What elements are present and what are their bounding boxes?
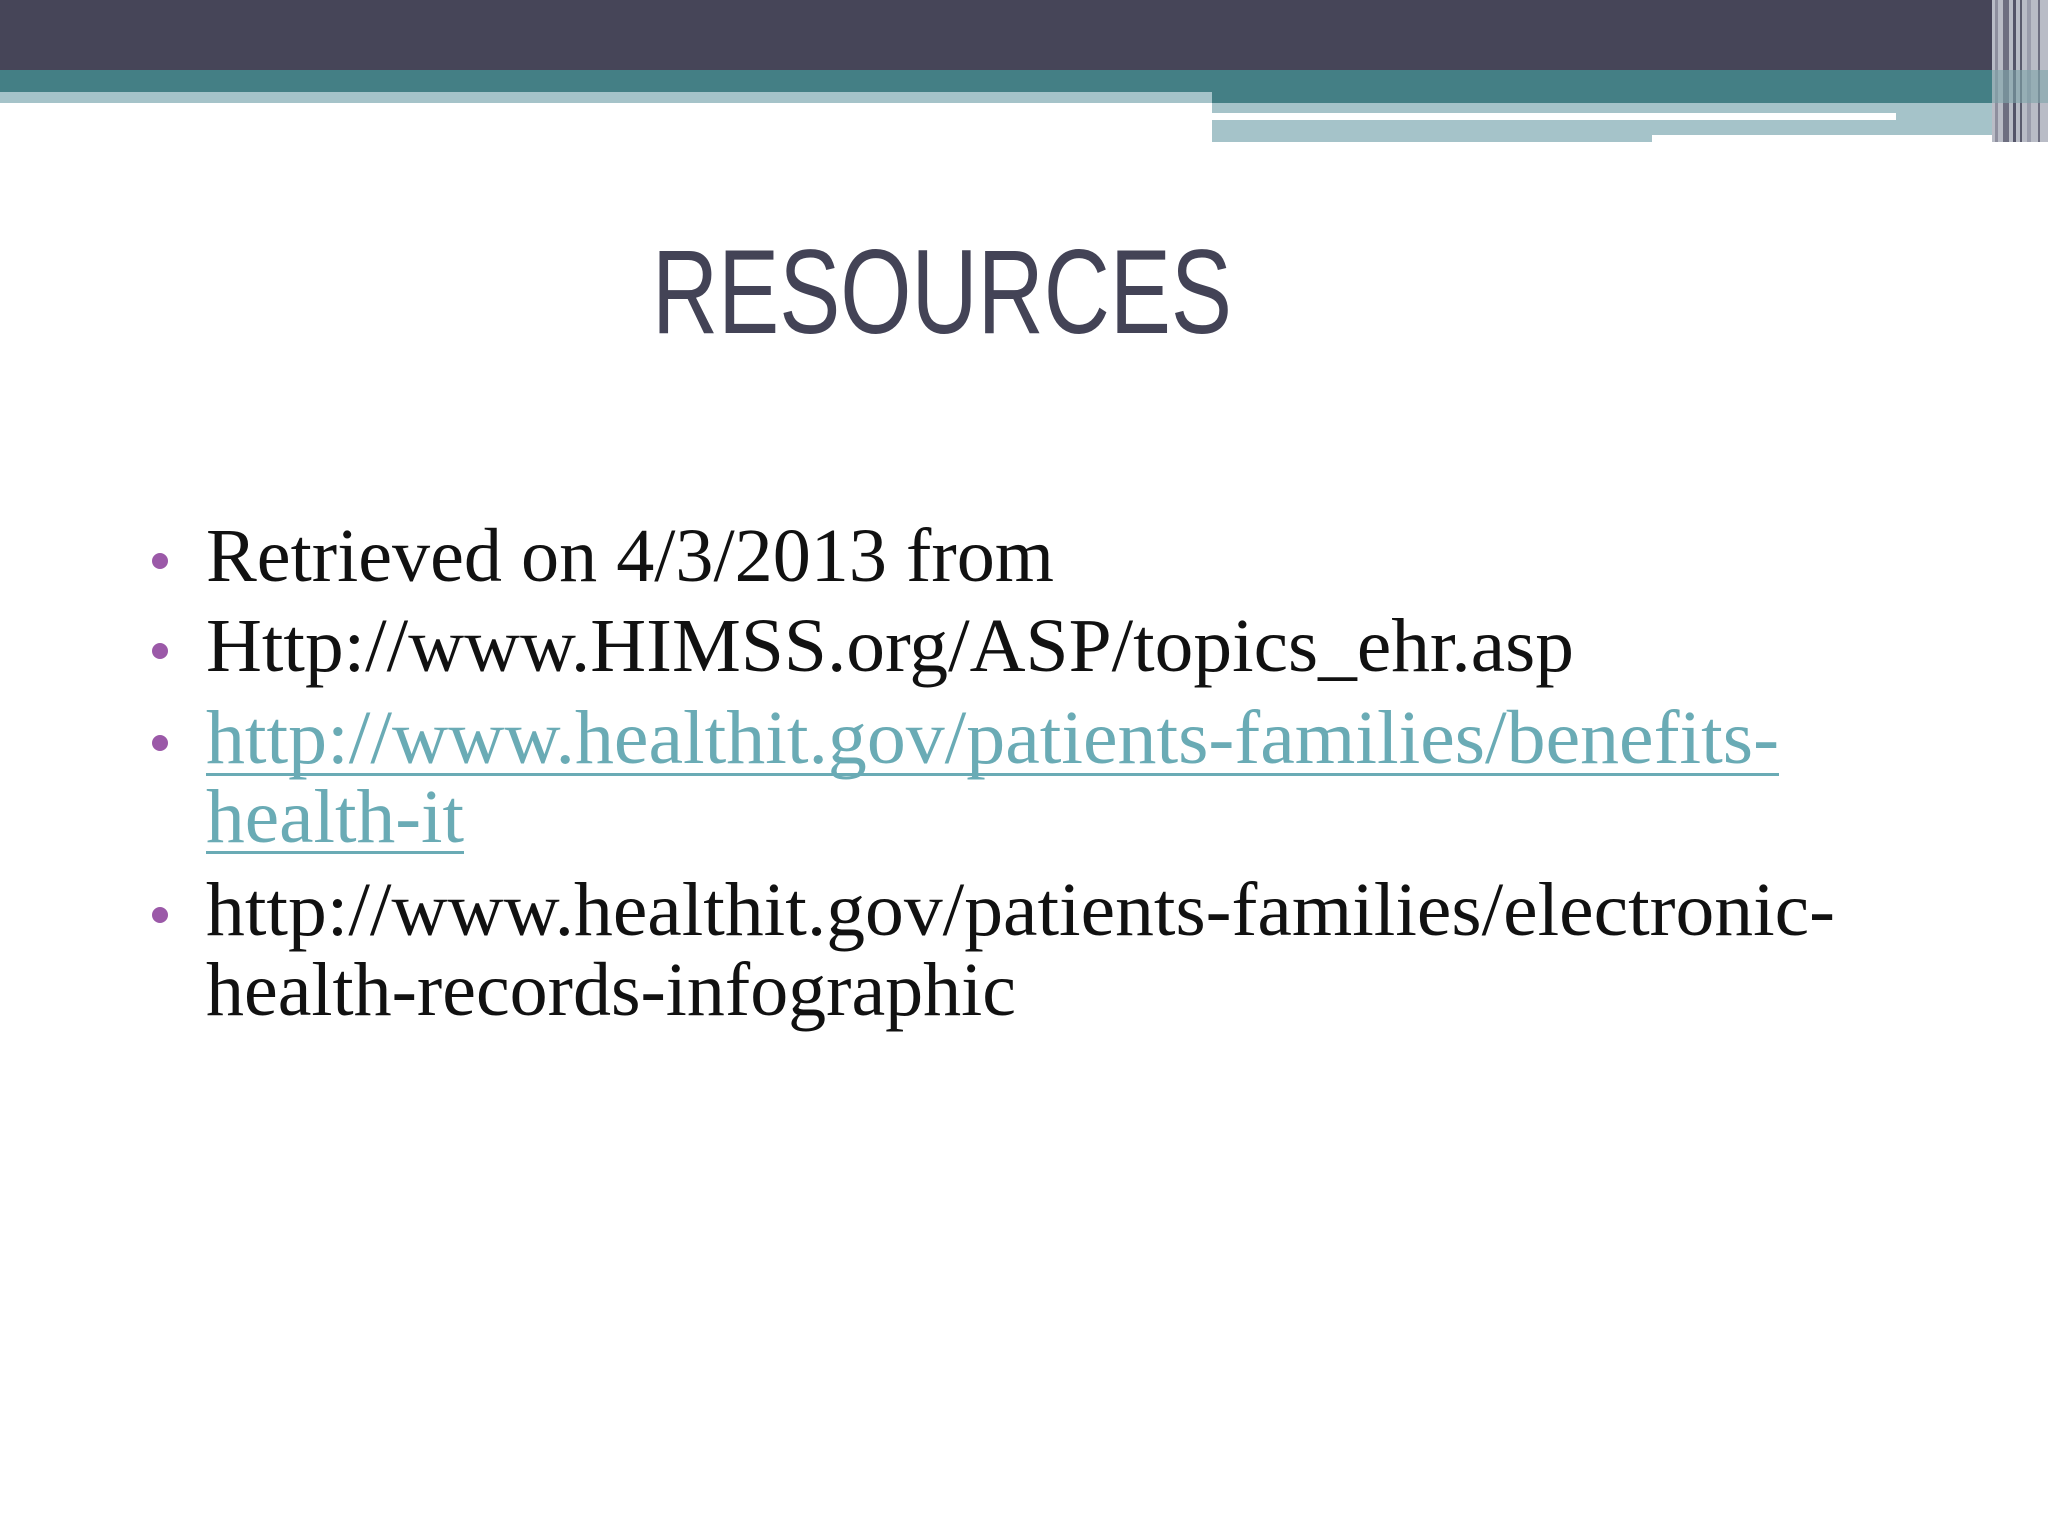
bullet 1: Retrieved on 4/3/2013 from xyxy=(206,514,1054,598)
bullet 4 xyxy=(152,868,1835,1032)
header banner xyxy=(0,0,2048,142)
title: RESOURCES xyxy=(652,225,1232,359)
bullet 2: Http://www.HIMSS.org/ASP/topics_ehr.asp xyxy=(206,604,1574,688)
bullet 4: health-records-infographic xyxy=(206,948,1016,1032)
bullet 3: link: health-it xyxy=(206,775,464,859)
bullet 3: link xyxy=(152,696,1779,859)
bullet 3: link: http://www.healthit.gov/patients-families/benefits- xyxy=(206,696,1779,780)
bullet 4: http://www.healthit.gov/patients-families/electronic- xyxy=(206,868,1835,952)
